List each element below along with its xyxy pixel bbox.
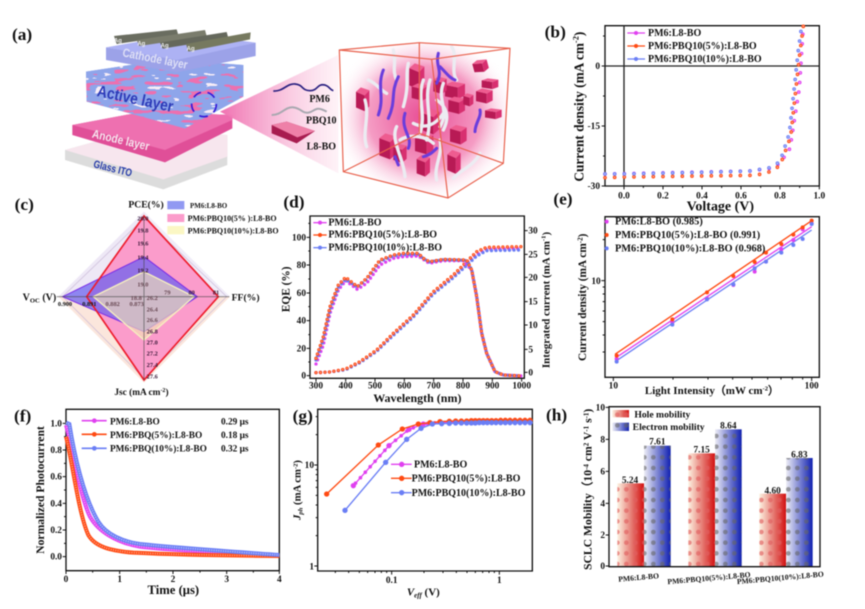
- radar tick labels: 19.6: [137, 241, 148, 248]
- bars PBQ10 5%: 7.15: [694, 445, 710, 455]
- bars PBQ10 10%: 4.60: [765, 486, 781, 496]
- decay axes: 0.8: [50, 446, 62, 456]
- legend f: PM6:PBQ(5%):L8-BO: [110, 430, 202, 441]
- Jph axes: ): [293, 460, 304, 464]
- cathode layer: [106, 33, 256, 72]
- EQE axes: 15: [528, 298, 538, 308]
- radar axis titles: PCE(%): [128, 199, 164, 210]
- radar tick labels: 26.2: [147, 295, 158, 302]
- legend d: PM6:PBQ10(10%):L8-BO: [328, 243, 442, 254]
- cathode layer: Cathode layer: [121, 46, 189, 72]
- J-V axes: [571, 26, 825, 215]
- silver electrodes: Ag: [137, 41, 146, 47]
- legend f: 0.29 μs: [221, 417, 249, 427]
- EQE axes: EQE (%): [280, 266, 292, 312]
- polymer legend: PM6: [309, 94, 330, 105]
- zoom wedge: [220, 55, 338, 173]
- Jph axes: (mA cm: [293, 469, 304, 508]
- EQE axes: 500: [368, 381, 382, 391]
- light intensity axes: 10: [609, 382, 618, 392]
- mobility axes: [581, 403, 820, 572]
- J-V axes: ): [571, 32, 586, 36]
- light intensity axes: -2: [576, 237, 584, 243]
- J-V axes: -2: [572, 36, 581, 43]
- radar grid: [58, 212, 230, 383]
- category labels: [618, 570, 824, 586]
- decay axes: 4: [277, 575, 282, 585]
- panel label b: (b): [545, 22, 566, 41]
- EQE PBQ10 5%: [316, 253, 522, 376]
- radar tick labels: 0.900: [58, 301, 72, 308]
- radar tick labels: 20.0: [137, 216, 148, 223]
- radar tick labels: 27.6: [147, 374, 158, 381]
- light intensity axes: [576, 217, 819, 397]
- legend f: PM6:L8-BO: [110, 417, 160, 427]
- polymer legend: PBQ10: [306, 115, 337, 126]
- EQE axes: ): [540, 232, 552, 236]
- decay axes: 0: [64, 575, 69, 585]
- decay axes: 0.4: [50, 499, 62, 509]
- radar tick labels: 80: [189, 289, 195, 296]
- radar tick labels: 0.891: [82, 301, 96, 308]
- panel c: radar chart: [15, 195, 279, 398]
- EQE PM6:L8-BO: [316, 256, 522, 376]
- mobility axes: -4: [582, 464, 590, 470]
- radar tick labels: 26.6: [147, 317, 158, 324]
- legend c: PM6:PBQ10(10%):L8-BO: [188, 226, 279, 235]
- J-V axes: -30: [588, 182, 600, 192]
- Jph axes: J: [293, 514, 304, 521]
- decay PBQ 10%: [66, 423, 279, 555]
- EQE axes: 30: [528, 227, 538, 237]
- panel label d: (d): [283, 192, 305, 211]
- EQE axes: 5: [528, 345, 533, 355]
- J-V axes: 0.2: [657, 191, 669, 201]
- Jph axes: 1: [309, 562, 314, 572]
- glass ITO layer: [65, 128, 227, 189]
- decay axes: [34, 409, 282, 597]
- J-V axes: 1.0: [813, 191, 825, 201]
- legend c: PM6:PBQ10(5% ):L8-BO: [188, 214, 277, 223]
- radar axis titles: (V): [40, 293, 56, 304]
- legend f: 0.18 μs: [221, 431, 249, 441]
- Jph axes: eff: [414, 591, 422, 599]
- radar axis titles: ): [165, 387, 169, 398]
- EQE axes: 700: [427, 381, 441, 391]
- legend b: PM6:PBQ10(10%):L8-BO: [648, 54, 762, 65]
- EQE axes: 100: [292, 233, 306, 243]
- light intensity axes: ): [577, 233, 589, 237]
- panel b: J-V curves: [545, 22, 825, 215]
- polygon PBQ10 10%: [93, 272, 194, 340]
- Jph axes: [292, 409, 532, 599]
- data points PBQ10 10%: [615, 222, 814, 364]
- curve PM6:L8-BO: [605, 26, 803, 174]
- decay axes: 3: [224, 575, 229, 585]
- glass ITO layer: Glass ITO: [92, 158, 133, 180]
- legend e: PM6:L8-BO (0.985): [615, 216, 703, 227]
- radar tick labels: 19.4: [137, 254, 149, 261]
- mobility axes: 10: [596, 403, 605, 413]
- panel g: Jph vs Veff: [292, 406, 533, 599]
- legend h: Hole mobility: [634, 409, 691, 420]
- Jph axes: 0.1: [386, 576, 398, 586]
- legend f: 0.32 μs: [221, 445, 249, 455]
- panel label h: (h): [546, 406, 567, 425]
- J-V axes: 0.8: [774, 191, 786, 201]
- decay PM6:L8-BO: [66, 425, 279, 555]
- bars PBQ10 5%: 8.64: [720, 421, 737, 431]
- decay axes: 0.0: [50, 553, 62, 563]
- legend g: PM6:PBQ10(10%):L8-BO: [412, 488, 526, 499]
- decay axes: Time (μs): [148, 583, 199, 597]
- integrated current PBQ10 10%: [316, 250, 522, 373]
- legend h: Electron mobility: [633, 422, 705, 433]
- panel label e: (e): [553, 190, 573, 209]
- EQE axes: Integrated current (mA cm: [540, 241, 552, 368]
- EQE axes: -1: [541, 236, 548, 241]
- bars PM6:L8-BO: 5.24: [622, 476, 638, 486]
- panel label a: (a): [12, 25, 32, 44]
- silver electrodes: [114, 29, 251, 53]
- polymer legend: [272, 84, 337, 152]
- legend b: [627, 28, 762, 65]
- legend g: PM6:PBQ10(5%):L8-BO: [412, 473, 521, 484]
- light intensity axes: 100: [805, 382, 819, 392]
- EQE axes: Wavelength (nm): [373, 391, 461, 405]
- mobility axes: 0: [600, 562, 605, 572]
- bars PBQ10 10%: [759, 451, 813, 566]
- data points PM6:L8-BO: [615, 221, 814, 361]
- legend d: [313, 217, 442, 254]
- EQE axes: 60: [297, 289, 306, 299]
- legend e: [605, 216, 765, 254]
- EQE axes: 40: [297, 317, 306, 327]
- legend b: PM6:PBQ10(5%):L8-BO: [648, 41, 757, 52]
- mobility axes: -1: [582, 412, 590, 418]
- polygon PM6:L8-BO: [63, 257, 197, 332]
- radar tick labels: 0.882: [106, 301, 120, 308]
- Jph axes: ph: [298, 507, 305, 516]
- legend e: PM6:PBQ10(5%):L8-BO (0.991): [615, 230, 760, 241]
- radar tick labels: 79: [164, 289, 170, 296]
- radar axis titles: Jsc (mA cm: [114, 388, 160, 398]
- EQE axes: 900: [485, 381, 500, 391]
- panel d: EQE: [280, 192, 552, 405]
- J-V axes: 0.0: [618, 191, 630, 201]
- silver electrodes: Ag: [161, 44, 169, 50]
- decay axes: Normalized Photocurrent: [34, 426, 47, 554]
- radar tick labels: 81: [213, 289, 219, 296]
- radar tick labels: 26.8: [147, 329, 158, 336]
- mobility axes: -1: [582, 425, 590, 432]
- light intensity axes: Current density (mA cm: [577, 243, 589, 361]
- category labels: PM6:L8-BO: [618, 571, 659, 584]
- legend e: PM6:PBQ10(10%):L8-BO (0.968): [615, 243, 765, 254]
- decay PBQ 5%: [66, 437, 279, 556]
- mobility axes: 2: [582, 442, 590, 446]
- curve PBQ10 5%: [324, 418, 533, 497]
- EQE axes: [280, 216, 552, 405]
- category labels: PM6:PBQ10(10%):L8-BO: [736, 570, 824, 586]
- bars PM6:L8-BO: 7.61: [649, 438, 666, 448]
- silver electrodes: Ag: [187, 47, 195, 53]
- polymer legend: L8-BO: [307, 141, 336, 152]
- Jph axes: 1: [497, 576, 502, 586]
- decay axes: 1.0: [50, 419, 62, 429]
- legend f: PM6:PBQ(10%):L8-BO: [110, 444, 207, 455]
- anode layer: Anode layer: [91, 127, 151, 153]
- mobility axes: 8: [600, 435, 605, 445]
- mobility axes: s: [582, 418, 595, 426]
- curve PBQ10 10%: [605, 26, 802, 174]
- bars PBQ10 10%: 6.83: [791, 451, 808, 461]
- polygon PBQ10 5% fill: [87, 216, 218, 380]
- radar tick labels: 27.0: [147, 340, 158, 347]
- bars PM6:L8-BO: [617, 438, 671, 566]
- radar tick labels: 27.4: [147, 362, 159, 369]
- radar tick labels: 19.0: [137, 282, 148, 289]
- light intensity axes: -2: [763, 386, 769, 393]
- active layer: Active layer: [96, 83, 175, 116]
- radar axis titles: FF(%): [232, 293, 260, 304]
- legend c: [167, 201, 279, 235]
- integrated current PM6:L8-BO: [316, 249, 522, 373]
- legend h: [612, 409, 705, 433]
- radar tick labels: 19.8: [137, 228, 148, 235]
- radar axis titles: V: [23, 293, 30, 304]
- radar axis titles: [23, 199, 260, 398]
- data points PBQ10 5%: [615, 219, 814, 358]
- EQE axes: 0: [528, 368, 533, 378]
- EQE axes: 400: [339, 381, 353, 391]
- panel label g: (g): [293, 406, 313, 425]
- EQE axes: 10: [528, 321, 538, 331]
- EQE axes: 1000: [512, 381, 531, 391]
- radar tick labels: [58, 216, 219, 381]
- J-V axes: 0.4: [696, 191, 708, 201]
- Jph axes: -2: [292, 463, 299, 469]
- panel f: photocurrent decay: [14, 406, 282, 597]
- J-V axes: Voltage (V): [687, 200, 754, 215]
- mobility axes: 4: [600, 499, 605, 509]
- mobility axes: cm: [582, 446, 595, 464]
- EQE axes: 20: [528, 273, 538, 283]
- EQE axes: 20: [297, 344, 306, 354]
- fit lines: [615, 221, 812, 362]
- J-V axes: -15: [588, 122, 600, 132]
- legend d: PM6:L8-BO: [328, 217, 382, 228]
- mobility axes: SCLC Mobility（10: [582, 470, 595, 570]
- panel label c: (c): [15, 195, 34, 214]
- legend d: PM6:PBQ10(5%):L8-BO: [328, 230, 437, 241]
- curve PBQ10 5%: [605, 26, 803, 178]
- Jph axes: (V): [422, 586, 440, 598]
- EQE axes: 80: [297, 261, 306, 271]
- category labels: PM6:PBQ10(5%):L8-BO: [667, 570, 751, 586]
- radar axes: [57, 216, 229, 380]
- decay axes: 1: [117, 575, 122, 585]
- J-V axes: 0.6: [735, 191, 747, 201]
- EQE PBQ10 10%: [316, 254, 522, 376]
- light intensity axes: Light Intensity（mW cm: [645, 385, 763, 397]
- radar axis titles: -2: [160, 388, 165, 394]
- light intensity axes: 10: [591, 277, 601, 287]
- Jph axes: 10: [305, 461, 314, 471]
- mobility axes: 2: [600, 531, 605, 541]
- silver electrodes: Ag: [114, 39, 122, 45]
- mobility axes: V: [582, 431, 595, 443]
- J-V axes: Current density (mA cm: [571, 43, 586, 182]
- curve PM6:L8-BO: [351, 421, 532, 488]
- decay axes: 2: [171, 575, 176, 585]
- EQE axes: 300: [309, 381, 323, 391]
- curve PBQ10 10%: [342, 420, 533, 513]
- radar tick labels: 0.873: [130, 301, 144, 308]
- mobility axes: ): [582, 409, 595, 413]
- legend g: [391, 459, 526, 499]
- panel e: light intensity: [553, 190, 819, 397]
- active layer: [86, 59, 243, 128]
- Jph axes: V: [407, 586, 416, 598]
- integrated current PBQ10 5%: [316, 247, 522, 373]
- legend f: [82, 417, 249, 455]
- polygon PBQ10 5% outline: [87, 216, 218, 380]
- radar tick labels: 27.2: [147, 350, 158, 357]
- EQE axes: 0: [301, 372, 306, 382]
- decay axes: 0.6: [50, 473, 62, 483]
- morphology box: [339, 43, 510, 198]
- J-V axes: 0: [595, 62, 600, 72]
- radar axis titles: OC: [30, 298, 40, 305]
- EQE axes: 800: [456, 381, 470, 391]
- legend g: PM6:L8-BO: [414, 459, 467, 470]
- radar tick labels: 19.2: [137, 268, 148, 275]
- radar tick labels: 18.8: [131, 295, 142, 302]
- panel label f: (f): [14, 406, 32, 425]
- legend c: PM6:L8-BO: [190, 202, 228, 210]
- panel h: SCLC mobility bars: [546, 403, 824, 586]
- EQE axes: 600: [397, 381, 412, 391]
- radar tick labels: 26.4: [147, 306, 159, 313]
- EQE axes: 25: [528, 250, 538, 260]
- panel a: device schematic: [12, 25, 510, 198]
- legend b: PM6:L8-BO: [648, 28, 701, 39]
- mobility axes: 6: [600, 467, 605, 477]
- decay axes: 0.2: [50, 526, 62, 536]
- light intensity axes: ）: [768, 384, 779, 397]
- anode layer: [72, 112, 232, 162]
- bars PBQ10 5%: [688, 421, 742, 566]
